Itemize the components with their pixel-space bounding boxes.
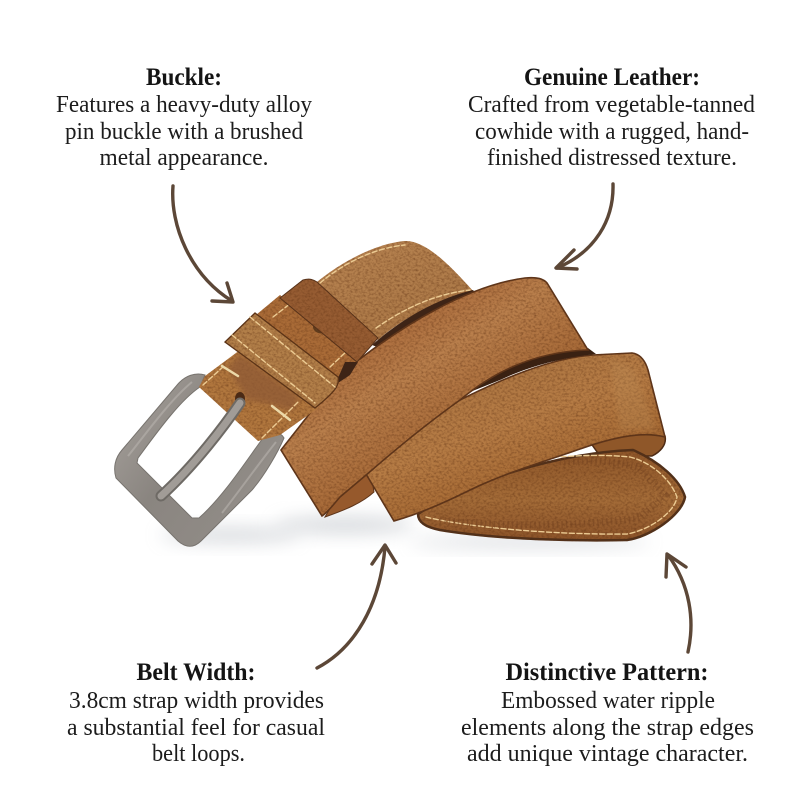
underside lining of lower strap	[590, 434, 665, 456]
belt tip with embossed pattern	[418, 450, 685, 540]
dark gap beside loops	[335, 362, 358, 385]
heading block: Belt Width: belt loops.	[152, 740, 245, 767]
back strap with stitching	[312, 241, 480, 350]
heading block: Belt Width: Belt Width:	[136, 659, 256, 686]
small strap piece behind, left of lower strap	[325, 468, 374, 517]
heading block: Genuine Leather: Genuine Leather:	[524, 64, 700, 91]
heading block: Belt Width: a substantial feel for casual	[67, 714, 325, 741]
heading block: Buckle: pin buckle with a brushed	[65, 118, 303, 145]
buckle frame	[115, 374, 284, 546]
heading block: Genuine Leather: cowhide with a rugged, hand-	[475, 118, 749, 145]
heading block: Distinctive Pattern: elements along the strap edges	[461, 714, 754, 741]
heading block: Buckle: Features a heavy-duty alloy	[56, 91, 313, 118]
heading block: Belt Width	[67, 659, 325, 767]
arrow: to leather	[556, 184, 613, 269]
strap between loops	[250, 295, 360, 385]
arrow: to belt width	[317, 545, 396, 668]
lower strap loop	[366, 353, 665, 521]
rivet	[313, 320, 331, 334]
arrow: to pattern	[666, 554, 691, 652]
middle strap loop	[281, 278, 588, 516]
ground shadows	[160, 517, 650, 547]
heading block: Genuine Leather: Crafted from vegetable-tanned	[468, 91, 755, 118]
heading block: Distinctive Pattern: Distinctive Pattern:	[506, 659, 708, 686]
heading block: Genuine Leather: finished distressed texture.	[487, 144, 737, 171]
stitched keeper loop	[225, 313, 338, 408]
arrow: to buckle	[173, 186, 233, 302]
heading block: Distinctive Pattern: Embossed water ripple	[501, 687, 715, 714]
belt illustration	[115, 241, 685, 547]
heading block: Distinctive Pattern: add unique vintage character.	[467, 740, 748, 767]
strap stitching between loops	[273, 303, 349, 367]
buckle pin	[161, 403, 240, 496]
heading block: Genuine Leather	[468, 64, 755, 171]
gap shadow between straps	[470, 348, 596, 392]
plain dark keeper loop	[280, 279, 378, 362]
heading block: Distinctive Pattern	[461, 659, 754, 767]
heading block: Belt Width: 3.8cm strap width provides	[69, 687, 324, 714]
buckle end of strap	[199, 350, 318, 441]
heading block: Buckle: metal appearance.	[100, 144, 268, 171]
heading block: Buckle	[56, 64, 313, 171]
heading block: Buckle: Buckle:	[146, 64, 222, 91]
